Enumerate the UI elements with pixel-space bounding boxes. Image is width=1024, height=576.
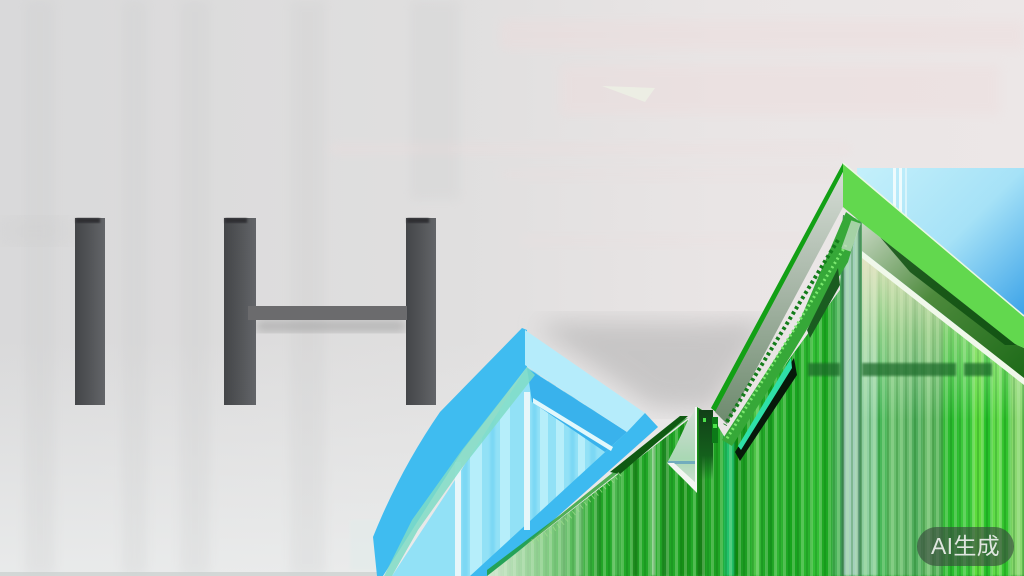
sky panel <box>857 168 1024 333</box>
letter I <box>75 218 105 405</box>
roof shadow <box>535 320 770 410</box>
blue roof fascia <box>470 413 658 576</box>
lower green roof edge <box>487 416 688 576</box>
green roof underside <box>862 223 1024 378</box>
teal lattice strip <box>384 367 535 576</box>
connector column <box>699 410 718 480</box>
blue window bar <box>533 398 613 451</box>
green left eave <box>711 163 843 413</box>
badge: AI生成: AI生成 <box>931 533 1000 559</box>
green lattice strip <box>722 212 860 446</box>
letter H <box>224 218 436 405</box>
blue roof top face <box>525 330 645 432</box>
badge: AI生成 <box>917 527 1014 566</box>
blue glass facade <box>392 367 627 576</box>
green facade <box>480 200 1024 576</box>
dark rafter shadow <box>880 237 1017 345</box>
dark inner frame <box>807 268 840 338</box>
dark gutter with cyan light <box>735 358 797 461</box>
white mullions <box>455 392 530 576</box>
blue outer wall <box>373 328 527 576</box>
white window sash <box>862 251 1024 385</box>
notch window <box>667 407 699 494</box>
grey soffit <box>715 172 843 424</box>
green roof top face <box>843 163 1024 348</box>
blue building <box>373 328 658 576</box>
dark horizontal band <box>808 363 992 376</box>
